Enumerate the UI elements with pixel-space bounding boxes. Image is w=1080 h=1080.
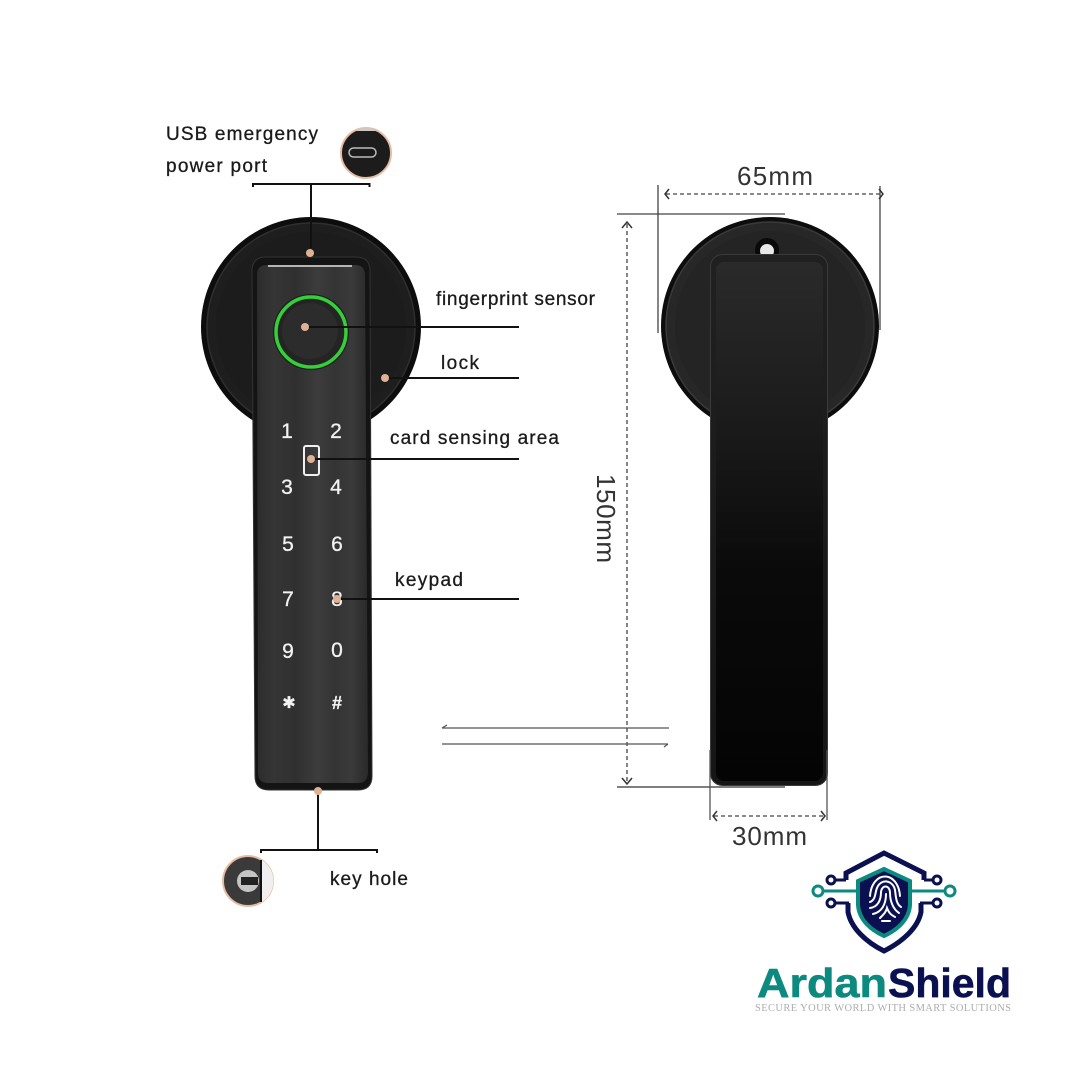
keypad digits: 7 [282,588,294,611]
label: lock: lock [441,353,480,374]
callout dots [301,249,389,795]
keypad symbols [282,693,342,713]
back handle [710,254,828,786]
logo: circuit lines [813,876,955,907]
label: card sensing area: card sensing area [390,428,559,449]
logo: wordmark Ardan: Ardan [757,960,887,1006]
screw hole [755,238,779,262]
keypad digits: 5 [282,533,294,556]
logo [755,853,1011,1014]
dimension: 150mm: 150mm [591,474,621,563]
front round base [201,217,421,437]
back view of lock [661,217,879,786]
keypad digits: 3 [281,476,293,499]
front handle [252,257,372,790]
logo: outer shield [846,853,924,951]
keypad digits: 4 [330,476,342,499]
keypad digits: 6 [331,533,343,556]
keypad digits: 0 [331,639,343,662]
keypad digits: 8 [331,588,343,611]
back round base [661,217,879,435]
logo: fingerprint [870,876,901,921]
dimension: 65mm: 65mm [737,161,813,191]
icon: key hole inset [223,856,273,906]
dimension: 30mm [710,750,827,851]
callout lines [253,184,519,853]
logo: tagline: SECURE YOUR WORLD WITH SMART SOLUTIONS [755,1003,1011,1014]
dimension: 65mm [617,161,883,333]
icon: usb port inset [341,128,391,178]
card sensing icon [304,446,319,475]
keypad symbols: ✱ [282,693,296,712]
keypad digits: 2 [330,420,342,443]
dimension: 30mm: 30mm [732,821,807,851]
front view of lock [201,217,421,790]
logo: inner shield [858,869,910,936]
keypad digits [281,420,343,663]
labels: power port [166,156,268,177]
label: usb port: USB emergency [166,124,318,145]
label: keypad: keypad [395,570,463,591]
label: fingerprint sensor: fingerprint sensor [436,289,596,310]
label: key hole: key hole [330,869,408,890]
dimension: 150mm [591,222,785,787]
keypad digits: 9 [282,640,294,663]
labels [166,124,596,890]
keypad symbols: # [332,693,342,713]
keypad digits: 1 [281,420,293,443]
fingerprint sensor ring [273,294,349,370]
logo: wordmark Shield: Shield [888,960,1011,1006]
section arrows [442,725,669,747]
